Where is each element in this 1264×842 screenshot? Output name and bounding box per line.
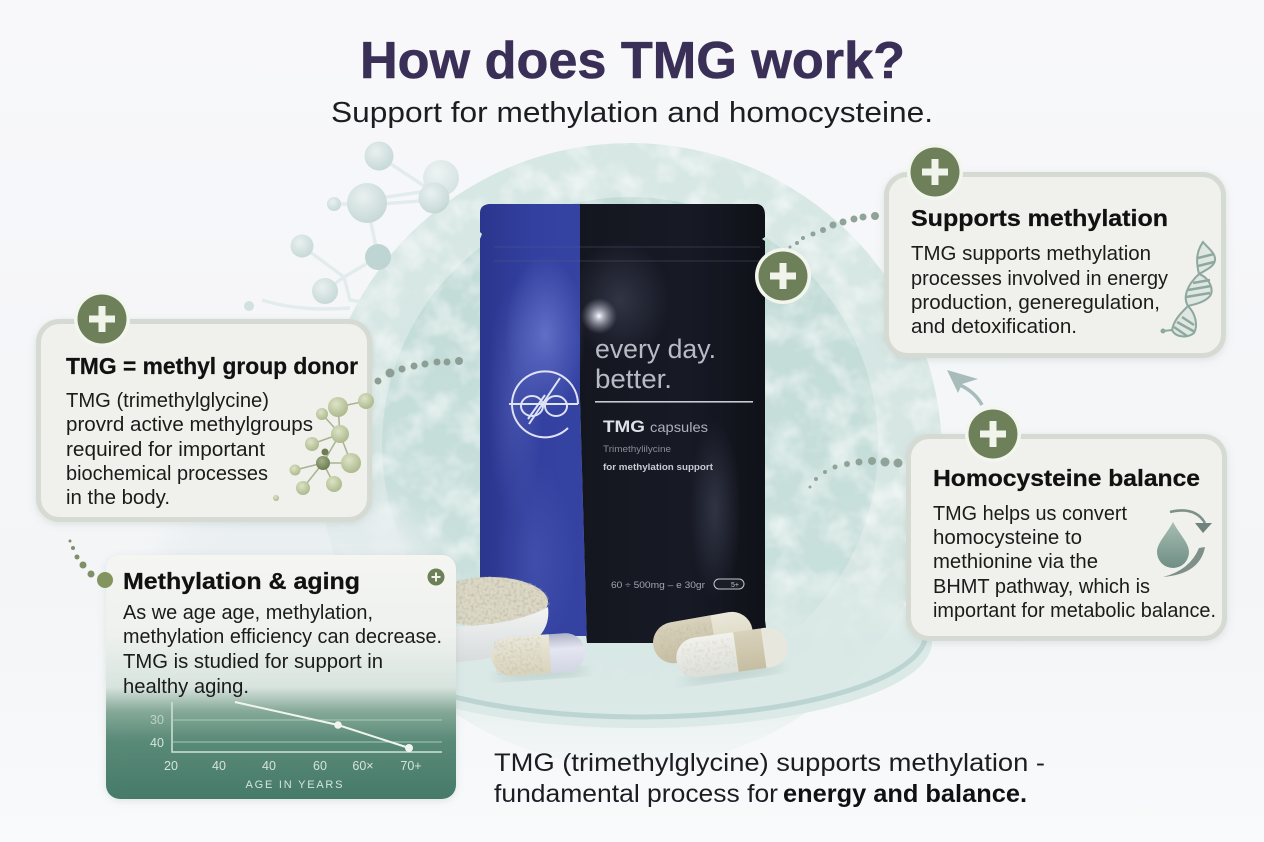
bullet dot	[97, 572, 113, 588]
small plus badge	[425, 566, 447, 588]
panel: supports methylation	[886, 144, 1224, 356]
icon: DNA helix	[1160, 242, 1215, 336]
title: How does TMG work?	[360, 32, 905, 90]
line chart: 20	[164, 759, 178, 773]
dotted connector: aging card	[68, 540, 94, 578]
powder bowl	[456, 576, 550, 662]
bottom summary text: fundamental process for	[494, 780, 778, 808]
tagline: every day.	[595, 334, 716, 364]
line chart: 40	[262, 759, 276, 773]
tagline: better.	[595, 364, 672, 394]
heading: Supports methylation	[911, 205, 1168, 231]
line chart: 70+	[400, 759, 422, 773]
bottom summary text: TMG (trimethylglycine) supports methylation -	[494, 749, 1045, 777]
heading: Homocysteine balance	[933, 465, 1200, 491]
product name: TMG	[603, 417, 645, 436]
body text: TMG (trimethylglycine)	[66, 390, 269, 412]
arrow: homocysteine to methylation	[947, 370, 982, 405]
capsule: lavender	[490, 632, 590, 682]
panel: methylation and aging	[97, 555, 456, 799]
capsule: white and beige front	[674, 625, 791, 687]
capsule: beige back	[650, 609, 756, 666]
background sphere	[150, 143, 942, 767]
body text	[123, 602, 442, 698]
product name: capsules	[650, 419, 708, 435]
plus badge on pouch	[755, 248, 811, 304]
line chart: AGE IN YEARS	[246, 779, 342, 791]
body text: in the body.	[66, 487, 170, 509]
bottom summary text: energy and balance.	[783, 780, 1027, 808]
molecule decoration top	[244, 142, 459, 311]
subtitle: Support for methylation and homocysteine.	[331, 97, 933, 129]
body text: production, generegulation,	[911, 292, 1160, 314]
line chart	[150, 702, 442, 791]
body text: BHMT pathway, which is	[933, 576, 1150, 598]
body text: and detoxification.	[911, 316, 1077, 338]
bottom summary text	[494, 749, 1045, 808]
body text: TMG supports methylation	[911, 243, 1151, 265]
icon: water drop with cycle	[1157, 510, 1212, 577]
body text: methionine via the	[933, 551, 1098, 573]
plus badge	[907, 144, 963, 200]
body text: healthy aging.	[123, 676, 249, 698]
body text: homocysteine to	[933, 527, 1082, 549]
body text: TMG helps us convert	[933, 503, 1127, 525]
product name: for methylation support	[603, 462, 714, 473]
line chart: 40	[212, 759, 226, 773]
body text: TMG is studied for support in	[123, 651, 383, 673]
body text	[933, 503, 1216, 622]
body text: provrd active methylgroups	[66, 414, 313, 436]
product name	[603, 417, 714, 473]
line chart: 60	[313, 759, 327, 773]
body text: processes involved in energy	[911, 268, 1168, 290]
line chart: 40	[150, 736, 164, 750]
panel: homocysteine balance	[908, 406, 1224, 638]
dotted connector: homocysteine card	[808, 457, 902, 488]
tagline	[595, 334, 716, 394]
body text: important for metabolic balance.	[933, 600, 1216, 622]
dotted connector: donor card	[366, 357, 463, 386]
body text: methylation efficiency can decrease.	[123, 626, 442, 648]
dosage line: 60 ÷ 500mg – e 30gr	[611, 580, 705, 591]
heading: Methylation & aging	[123, 568, 360, 594]
body text: As we age age, methylation,	[123, 602, 373, 624]
heading: TMG = methyl group donor	[66, 353, 358, 379]
body text: required for important	[66, 439, 265, 461]
product pouch	[478, 200, 771, 660]
dosage line: 5+	[731, 582, 739, 589]
plus badge	[74, 291, 130, 347]
dotted connector: methylation card	[788, 212, 879, 248]
icon: molecule	[273, 393, 374, 501]
pouch body	[478, 200, 771, 660]
panel: methyl group donor	[38, 291, 374, 520]
product name: Trimethylilycine	[603, 444, 671, 454]
line chart: 30	[150, 713, 164, 727]
line chart: 60×	[352, 759, 374, 773]
body text	[66, 390, 313, 509]
body text: biochemical processes	[66, 463, 268, 485]
body text	[911, 243, 1168, 338]
dosage line	[611, 579, 744, 591]
platform disc	[348, 556, 932, 728]
plus badge	[965, 406, 1021, 462]
logo	[509, 371, 578, 437]
